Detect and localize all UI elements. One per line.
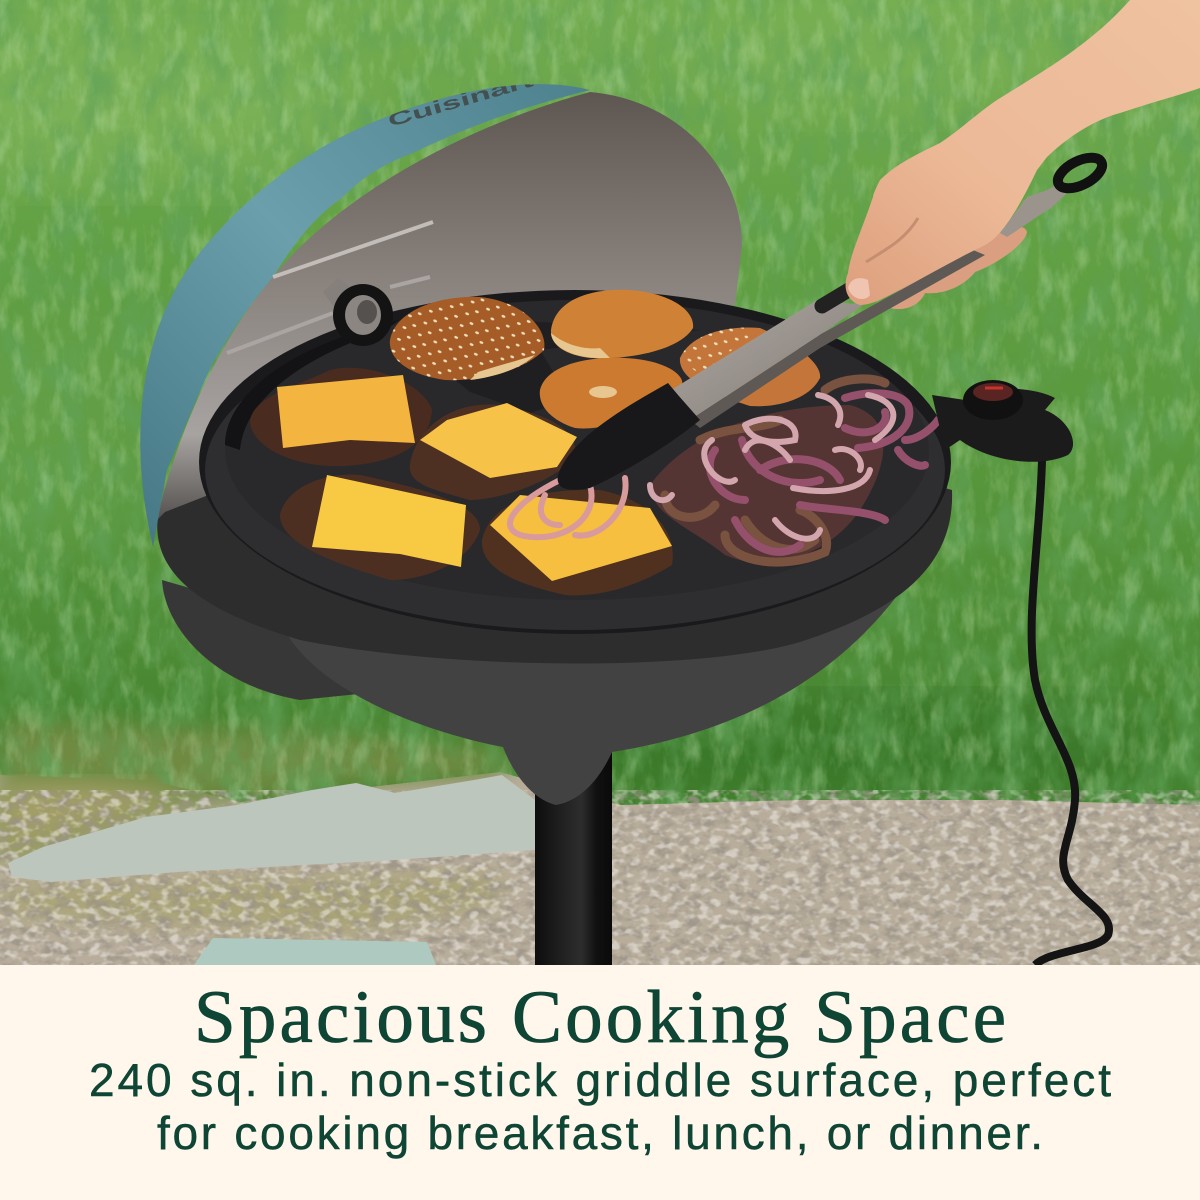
tongs: rear plate	[1000, 182, 1066, 237]
grill: control unit	[932, 380, 1073, 462]
grilled onions	[650, 379, 938, 563]
hand and arm	[846, 0, 1200, 305]
heading: Spacious Cooking Space	[194, 976, 1006, 1059]
lid vent slider	[227, 222, 433, 353]
grill: open lid interior	[157, 92, 742, 520]
tongs: rubber grip	[822, 288, 852, 306]
burger patty 4	[482, 490, 673, 595]
tongs: upper arm	[668, 300, 863, 420]
background: lawn	[0, 0, 1200, 830]
burger patty 3	[280, 475, 480, 580]
grill: flange	[157, 488, 952, 664]
bun: toasted top	[551, 290, 693, 358]
fingers behind tongs	[890, 227, 1027, 309]
background: gravel path and verge	[0, 720, 1200, 965]
caption band	[0, 965, 1200, 1200]
bun: sesame top	[390, 297, 544, 380]
griddle left inner edge	[225, 320, 400, 450]
lawn texture	[0, 0, 1200, 810]
grill: side lid handle	[162, 580, 358, 700]
power cord	[1032, 460, 1109, 965]
bun: sesame right	[680, 327, 820, 406]
onion held in tongs	[510, 478, 626, 537]
grill: lid outer shell	[140, 84, 590, 547]
small stone slab	[194, 938, 436, 965]
tongs: silicone head	[558, 383, 700, 490]
brand name on lid: Cuisinart	[386, 70, 535, 131]
stone slab	[8, 775, 535, 882]
tongs: hanging ring	[1053, 151, 1107, 195]
grill: bowl	[288, 585, 905, 805]
description: 240 sq. in. non-stick griddle surface, perfect	[89, 1054, 1111, 1106]
grill pole	[535, 750, 612, 965]
burger patty 2	[410, 403, 577, 500]
description	[89, 1054, 1111, 1159]
grill: griddle rim	[199, 290, 951, 634]
description: for cooking breakfast, lunch, or dinner.	[157, 1107, 1043, 1159]
tongs: lower arm	[690, 250, 985, 428]
bun: toasted front	[540, 358, 682, 428]
burger patty 1	[250, 368, 432, 466]
grill: griddle surface	[388, 300, 906, 397]
